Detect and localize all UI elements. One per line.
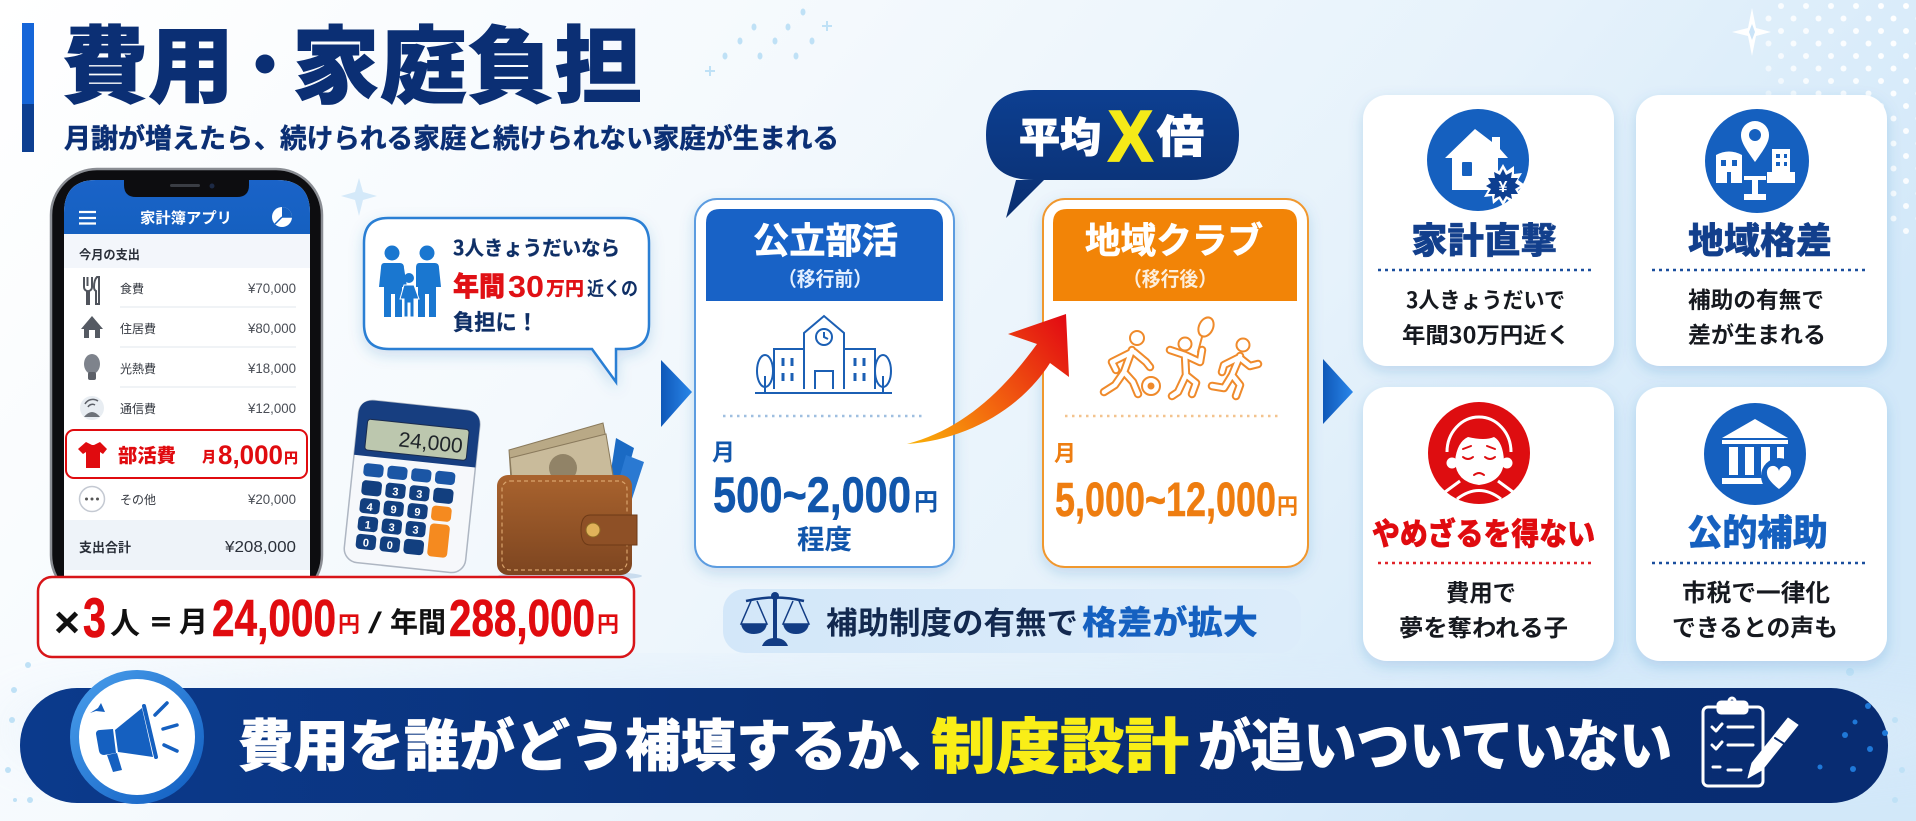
icon: calculator: 3 [388, 522, 395, 534]
row: club fee highlight: 円 [284, 448, 298, 468]
card body: 補助の有無で [1688, 283, 1824, 315]
row: housing: ¥80,000 [247, 321, 296, 336]
total calculation box: 3 [83, 586, 106, 649]
speech bubble: average X times: X [1108, 97, 1153, 177]
icon: calculator: 3 [416, 489, 423, 501]
total calculation box [38, 577, 634, 657]
price [1054, 436, 1298, 527]
panel header [706, 209, 943, 301]
row: total: ¥208,000 [224, 539, 296, 556]
row: telecom: 通信費 [120, 400, 156, 417]
bubble text: 万円 [546, 274, 584, 301]
icon: house with yen burst: ¥ [1499, 179, 1508, 196]
subtitle: 月謝が増えたら [64, 117, 253, 156]
subtitle: 、 [254, 117, 281, 156]
bubble text: 負担に！ [453, 305, 538, 337]
card body: 年間30万円近く [1402, 318, 1570, 350]
bubble text [453, 232, 638, 337]
card body: できるとの声も [1672, 608, 1838, 643]
arrow: cost increase [907, 314, 1069, 444]
row: housing: 住居費 [120, 320, 156, 337]
card body: 差が生まれる [1688, 318, 1826, 350]
panel header: （移行後） [1123, 263, 1217, 292]
panel header: （移行前） [778, 263, 872, 292]
banner message: 、 [898, 702, 954, 783]
card body: 費用で [1446, 574, 1516, 608]
card body [1688, 283, 1826, 350]
row: utilities: ¥18,000 [247, 361, 296, 376]
card body [1399, 574, 1568, 643]
row: telecom: ¥12,000 [247, 401, 296, 416]
price [712, 433, 938, 557]
bottom banner [20, 670, 1888, 804]
panel: public subsidy [1636, 387, 1887, 661]
bubble text: 3人きょうだいなら [453, 232, 620, 261]
row: other: ¥20,000 [247, 492, 296, 507]
total calculation box: 年間 [390, 601, 446, 641]
total calculation box: 288,000 [449, 590, 595, 648]
bubble text: 年間 [453, 265, 505, 304]
callout: subsidy gap: 格差が拡大 [1082, 596, 1258, 644]
card body [1672, 573, 1838, 643]
icon: house with yen burst [1427, 109, 1529, 211]
total calculation box: 人 [110, 599, 140, 643]
bubble text: 近くの [587, 274, 638, 301]
panel: public club (before) [695, 199, 954, 567]
banner message: 制度設計 [931, 699, 1189, 786]
panel: forced to quit [1363, 387, 1614, 661]
icon: calculator [343, 399, 481, 574]
row: total: 支出合計 [79, 537, 131, 556]
card body: 市税で一律化 [1682, 573, 1830, 608]
price: 500~2,000 [713, 467, 911, 523]
price: 程度 [797, 518, 852, 557]
card body [1402, 283, 1570, 350]
icon: sports figures [1104, 315, 1258, 396]
icon: calculator: 3 [412, 524, 419, 537]
price: 円 [914, 482, 938, 517]
panel header: 公立部活 [753, 212, 898, 264]
row: club fee highlight [66, 430, 307, 478]
total calculation box: 24,000 [212, 590, 336, 648]
menu icon [79, 212, 96, 224]
icon: calculator: 9 [390, 504, 397, 516]
banner message [238, 699, 1672, 786]
icon: calculator: 4 [366, 501, 374, 514]
expense heading: 今月の支出 [79, 244, 140, 263]
speech bubble: average X times: 倍 [1157, 101, 1204, 165]
subtitle: 続けられる家庭と続けられない家庭が生まれる [280, 117, 839, 156]
row: food: ¥70,000 [247, 281, 296, 296]
title: 費用 [62, 0, 234, 121]
arrow: to outcomes [1323, 359, 1353, 424]
icon: calculator: 3 [392, 486, 399, 499]
title block [22, 0, 839, 156]
icon: calculator: 9 [414, 506, 421, 519]
banner message: 費用を誰がどう補填するか [238, 702, 902, 783]
app title: 家計簿アプリ [140, 207, 232, 228]
phone: household budget app [51, 169, 322, 601]
row: club fee highlight: 月 [202, 446, 216, 467]
speech bubble: average X times: 平均 [1019, 104, 1101, 164]
card heading: 家計直撃 [1411, 212, 1557, 264]
row: total [79, 537, 296, 556]
price: 月 [1054, 436, 1076, 468]
title accent bar [22, 23, 34, 152]
card heading: 地域格差 [1688, 212, 1832, 264]
speech bubble: average X times [986, 90, 1239, 218]
panel header [1053, 209, 1297, 301]
title [62, 0, 642, 121]
panel header: 地域クラブ [1085, 212, 1263, 264]
icon: map pin and buildings [1705, 109, 1809, 213]
icon: calculator: 0 [362, 537, 370, 550]
total calculation box: ＝ [149, 603, 173, 640]
card heading: やめざるを得ない [1372, 509, 1595, 554]
panel: community club (after) [1043, 199, 1308, 567]
row: utilities [84, 354, 296, 380]
icon: megaphone [70, 670, 204, 804]
price: 月 [712, 433, 735, 467]
icon: calculator: 24,000 [397, 428, 464, 458]
total calculation box: / [368, 607, 383, 640]
icon: calculator: 1 [364, 519, 371, 532]
card heading: 公的補助 [1687, 504, 1828, 556]
total calculation box: 円 [597, 607, 619, 639]
card body: 3人きょうだいで [1406, 283, 1565, 315]
row: other [80, 486, 296, 512]
arrow: to comparison [661, 360, 692, 427]
icon: wallet with banknotes [497, 423, 644, 581]
price: 円 [1277, 489, 1298, 521]
callout: subsidy gap [723, 589, 1301, 653]
row: club fee highlight: 部活費 [118, 441, 176, 468]
callout text: 補助制度の有無で [826, 598, 1078, 643]
row: telecom [80, 396, 296, 420]
icon: sad child [1428, 402, 1530, 504]
total calculation box: × [54, 598, 80, 647]
icon: calculator: 0 [386, 540, 393, 552]
speech bubble: three siblings burden [364, 218, 649, 382]
row: food [84, 277, 296, 304]
price: 5,000~12,000 [1055, 474, 1276, 527]
icon: family [379, 246, 441, 317]
card body: 夢を奪われる子 [1399, 609, 1568, 643]
row: other: その他 [120, 491, 156, 508]
icon: school [755, 316, 892, 393]
row: utilities: 光熱費 [120, 360, 156, 377]
icon: bank with heart [1704, 403, 1806, 505]
pie icon [272, 207, 292, 227]
icon: clipboard and pen [1703, 698, 1798, 786]
row: club fee highlight: 8,000 [218, 440, 283, 470]
panel: regional gap [1636, 95, 1887, 366]
banner message: が追いついていない [1198, 702, 1672, 783]
row: housing [81, 316, 296, 338]
total calculation box: 月 [179, 599, 208, 641]
row: food: 食費 [120, 280, 144, 297]
title: 家庭負担 [292, 0, 642, 121]
icon: scales [741, 592, 809, 646]
total calculation box: 円 [338, 607, 360, 639]
panel: household impact [1363, 95, 1614, 366]
bubble text: 30 [508, 269, 544, 304]
